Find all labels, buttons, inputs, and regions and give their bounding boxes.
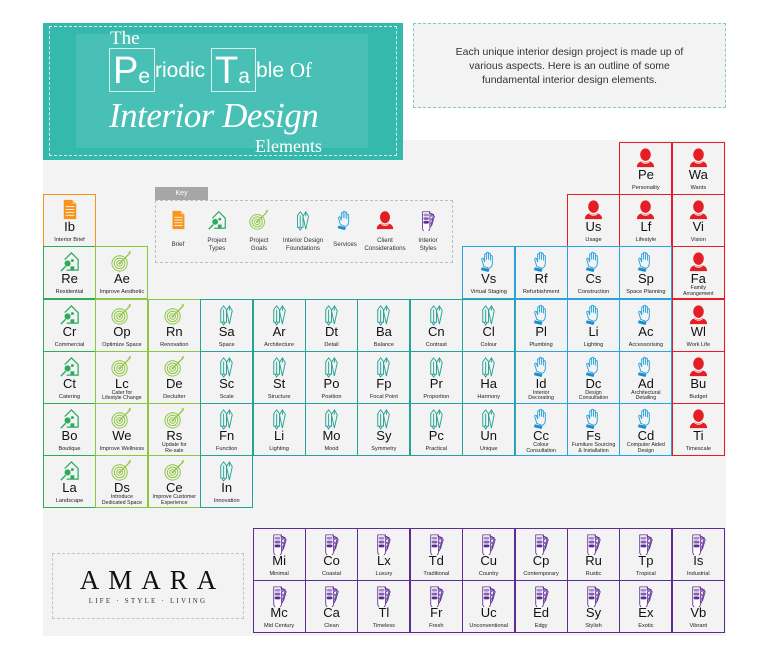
- key tab: [155, 187, 208, 200]
- periodic table grid: Family: [690, 285, 706, 291]
- periodic table grid: Improve Aesthetic: [100, 289, 144, 295]
- periodic table grid: Bu: [690, 376, 706, 391]
- periodic table grid: & Installation: [578, 448, 609, 454]
- key items: Goals: [251, 245, 267, 252]
- periodic table grid: Fa: [691, 271, 706, 286]
- periodic table grid: Contrast: [426, 342, 447, 348]
- periodic table grid: Cd: [638, 428, 654, 443]
- periodic table grid: Innovation: [214, 498, 240, 504]
- periodic table grid: Ds: [114, 480, 130, 495]
- periodic table grid: Fp: [376, 376, 391, 391]
- periodic table grid: Wl: [691, 324, 706, 339]
- periodic table grid: Budget: [689, 394, 707, 400]
- periodic table grid: Op: [113, 324, 131, 339]
- periodic table grid: Vi: [693, 219, 704, 234]
- interior styles block: Mc: [270, 605, 288, 620]
- row 1: [43, 194, 96, 247]
- periodic table grid: Work Life: [687, 342, 710, 348]
- interior styles block: Unconventional: [469, 623, 508, 629]
- periodic table grid: Cater for: [112, 390, 132, 396]
- periodic table grid: Ae: [114, 271, 130, 286]
- periodic table grid: Wa: [689, 167, 708, 182]
- interior styles block: Mid Century: [264, 623, 294, 629]
- interior styles block: Mi: [272, 553, 286, 568]
- periodic table grid: Ha: [480, 376, 497, 391]
- periodic table grid: Renovation: [160, 342, 188, 348]
- row 6: La: [62, 480, 77, 495]
- periodic table grid: Practical: [426, 446, 447, 452]
- row 4: [43, 351, 96, 404]
- periodic table grid: Computer Aided: [627, 442, 665, 448]
- periodic table grid: Dt: [325, 324, 338, 339]
- periodic table grid: Timescale: [686, 446, 711, 452]
- periodic table grid: Id: [536, 376, 547, 391]
- key items: Interior Design: [283, 237, 323, 244]
- periodic table grid: Design: [638, 448, 654, 454]
- interior styles block: Minimal: [269, 571, 289, 577]
- key items: Considerations: [364, 245, 406, 252]
- key tab: Key: [175, 190, 188, 197]
- key items: Project: [249, 237, 269, 244]
- row 4: Catering: [59, 394, 80, 400]
- periodic table grid: Experience: [161, 500, 188, 506]
- row 6: Landscape: [56, 498, 83, 504]
- key items: Services: [333, 241, 357, 248]
- row 4: Ct: [63, 376, 76, 391]
- periodic table grid: Po: [324, 376, 339, 391]
- periodic table grid: Fn: [219, 428, 234, 443]
- periodic table grid: Ti: [693, 428, 703, 443]
- key items: [172, 210, 438, 252]
- periodic table grid: Wants: [690, 185, 706, 191]
- periodic table grid: Scale: [220, 394, 234, 400]
- periodic table grid: Virtual Staging: [471, 289, 507, 295]
- grey background panel: [43, 140, 726, 636]
- intro text box: various aspects. Here is an outline of some: [469, 60, 670, 72]
- periodic table grid: Furniture Sourcing: [572, 442, 615, 448]
- periodic table grid: Pc: [429, 428, 444, 443]
- row 3: [43, 299, 96, 352]
- periodic table grid: Rs: [166, 428, 182, 443]
- row 2: Residential: [56, 289, 83, 295]
- intro text box: [413, 23, 726, 108]
- periodic table grid: Balance: [374, 342, 394, 348]
- periodic table grid: In: [221, 480, 232, 495]
- interior styles block: Fresh: [429, 623, 443, 629]
- interior styles block: Lx: [377, 553, 391, 568]
- interior styles block: Td: [429, 553, 444, 568]
- intro text box: Each unique interior design project is made up of: [456, 46, 683, 58]
- periodic table grid: Dedicated Space: [102, 500, 142, 506]
- periodic table grid: Rn: [166, 324, 183, 339]
- row 3: Cr: [63, 324, 76, 339]
- tagline: LIFE · STYLE · LIVING: [89, 597, 207, 605]
- title: Periodic Table Of: Ta: [215, 50, 250, 92]
- periodic table grid: Design: [585, 390, 602, 396]
- row 2: [43, 246, 96, 299]
- interior styles block: Ru: [585, 553, 602, 568]
- interior styles block: Edgy: [535, 623, 547, 629]
- periodic table grid: Consultation: [526, 448, 556, 454]
- periodic table grid: Sa: [219, 324, 235, 339]
- periodic table grid: Cc: [533, 428, 549, 443]
- periodic table grid: Interior: [533, 390, 549, 396]
- periodic table grid: Update for: [162, 442, 187, 448]
- key items: Brief: [172, 241, 184, 248]
- periodic table grid: Focal Point: [370, 394, 398, 400]
- row 2: Re: [61, 271, 78, 286]
- periodic table grid: Vs: [481, 271, 496, 286]
- periodic table grid: Harmony: [477, 394, 500, 400]
- periodic table grid: Architectural: [631, 390, 661, 396]
- periodic table grid: De: [166, 376, 183, 391]
- periodic table grid: We: [112, 428, 132, 443]
- periodic table grid: Arrangement: [683, 291, 714, 297]
- periodic table grid: Re-sale: [165, 448, 183, 454]
- periodic table grid: Optimize Space: [102, 342, 142, 348]
- periodic table grid: Ce: [166, 480, 183, 495]
- periodic table grid: Cn: [428, 324, 445, 339]
- periodic table grid: Fs: [586, 428, 601, 443]
- row 0: Personality: [632, 185, 660, 191]
- key items: Project: [207, 237, 227, 244]
- key items: Client: [377, 237, 393, 244]
- periodic table grid: Vision: [691, 237, 706, 243]
- periodic table grid: Ar: [273, 324, 286, 339]
- periodic table grid: Lf: [640, 219, 651, 234]
- interior styles block: Fr: [430, 605, 442, 620]
- periodic table grid: Structure: [268, 394, 290, 400]
- key items: Foundations: [286, 245, 320, 252]
- periodic table grid: Li: [588, 324, 599, 339]
- row 0: Pe: [638, 167, 654, 182]
- title: Periodic Table Of: riodic ble Of: [155, 58, 312, 82]
- intro text box: fundamental interior design elements.: [482, 74, 657, 86]
- periodic table grid: Accessorising: [629, 342, 663, 348]
- interior styles block: Clean: [324, 623, 339, 629]
- interior styles block: Vibrant: [689, 623, 707, 629]
- periodic table grid: Cs: [586, 271, 601, 286]
- periodic table grid: Ad: [638, 376, 654, 391]
- periodic table grid: Lighting: [584, 342, 603, 348]
- periodic table grid: Lifestyle: [636, 237, 656, 243]
- periodic table grid: Usage: [585, 237, 602, 243]
- periodic table grid: Sy: [376, 428, 391, 443]
- periodic table grid: Refurbishment: [523, 289, 559, 295]
- periodic table grid: Lc: [115, 376, 129, 391]
- periodic table grid: Space: [219, 342, 235, 348]
- interior styles block: Industrial: [687, 571, 710, 577]
- title banner: [43, 23, 403, 160]
- periodic table grid: Symmetry: [371, 446, 396, 452]
- interior styles block: Tp: [638, 553, 653, 568]
- title: Interior Design: Interior Design: [109, 96, 318, 135]
- periodic table grid: Us: [586, 219, 601, 234]
- interior styles block: Luxury: [375, 571, 392, 577]
- periodic table grid: Consultation: [579, 395, 608, 401]
- periodic table grid: Space Planning: [626, 289, 665, 295]
- interior styles block: Exotic: [638, 623, 654, 629]
- interior styles block: Co: [323, 553, 340, 568]
- periodic table grid: Colour: [533, 442, 549, 448]
- periodic table grid: Construction: [578, 289, 609, 295]
- interior styles block: Tl: [378, 605, 389, 620]
- row 5: Bo: [62, 428, 77, 443]
- interior styles block: Coastal: [322, 571, 341, 577]
- periodic table grid: Decorating: [528, 395, 554, 401]
- key items: Styles: [420, 245, 436, 252]
- AMARA logo box: [52, 553, 244, 619]
- title: Periodic Table Of: [109, 48, 312, 92]
- periodic table grid: Pr: [430, 376, 443, 391]
- row 5: Boutique: [58, 446, 81, 452]
- periodic table grid: Ac: [638, 324, 653, 339]
- interior styles block: Contemporary: [523, 571, 559, 577]
- interior styles block: Uc: [481, 605, 497, 620]
- key items: Interior: [418, 237, 438, 244]
- row 5: [43, 403, 96, 456]
- periodic table grid: Rf: [535, 271, 548, 286]
- periodic table grid: Sc: [219, 376, 234, 391]
- periodic table grid: Improve Wellness: [100, 446, 144, 452]
- logo wordmark: AMARA: [80, 565, 225, 595]
- periodic table grid: Colour: [480, 342, 497, 348]
- title: Periodic Table Of: Pe: [113, 50, 150, 92]
- periodic table grid: Un: [480, 428, 497, 443]
- periodic table grid: Cl: [483, 324, 495, 339]
- row 1: Ib: [64, 219, 75, 234]
- interior styles block: Traditional: [423, 571, 449, 577]
- interior styles block: Rustic: [586, 571, 601, 577]
- title: Elements: Elements: [255, 136, 322, 156]
- row 3: Commercial: [55, 342, 84, 348]
- periodic table grid: Plumbing: [529, 342, 553, 348]
- periodic table grid: Declutter: [163, 394, 185, 400]
- interior styles block: Ca: [323, 605, 340, 620]
- periodic table grid: Detailing: [636, 395, 656, 401]
- periodic table grid: Ba: [376, 324, 392, 339]
- periodic table grid: St: [273, 376, 285, 391]
- periodic table grid: Sp: [638, 271, 654, 286]
- interior styles block: Tropical: [636, 571, 656, 577]
- interior styles block: Ex: [638, 605, 653, 620]
- interior styles block: Country: [479, 571, 498, 577]
- periodic table grid: Dc: [586, 376, 601, 391]
- interior styles block: Is: [693, 553, 703, 568]
- periodic table grid: Lifestyle Change: [102, 395, 142, 401]
- interior styles block: Vb: [690, 605, 706, 620]
- periodic table grid: Mood: [324, 446, 338, 452]
- row 0: [619, 142, 672, 195]
- periodic table grid: Improve Customer: [152, 494, 196, 500]
- periodic table grid: Detail: [324, 342, 339, 348]
- interior styles block: Cu: [480, 553, 497, 568]
- periodic table grid: Mo: [322, 428, 341, 443]
- periodic table grid: Li: [274, 428, 284, 443]
- periodic table grid: Proportion: [423, 394, 449, 400]
- interior styles block: Stylish: [585, 623, 602, 629]
- row 6: [43, 455, 96, 508]
- interior styles block: Ed: [533, 605, 549, 620]
- key: [155, 187, 453, 263]
- key items: Types: [209, 245, 225, 252]
- periodic table grid: Position: [322, 394, 341, 400]
- interior styles block: Timeless: [373, 623, 395, 629]
- title: The: The: [110, 28, 140, 49]
- periodic table grid: Lighting: [269, 446, 289, 452]
- periodic table grid: Unique: [480, 446, 498, 452]
- row 1: Interior Brief: [54, 237, 85, 243]
- interior styles block: Cp: [533, 553, 549, 568]
- periodic table grid: Introduce: [111, 494, 133, 500]
- interior styles block: Sy: [586, 605, 601, 620]
- periodic table grid: Architecture: [264, 342, 294, 348]
- periodic table grid: Function: [216, 446, 237, 452]
- periodic table grid: Pl: [535, 324, 547, 339]
